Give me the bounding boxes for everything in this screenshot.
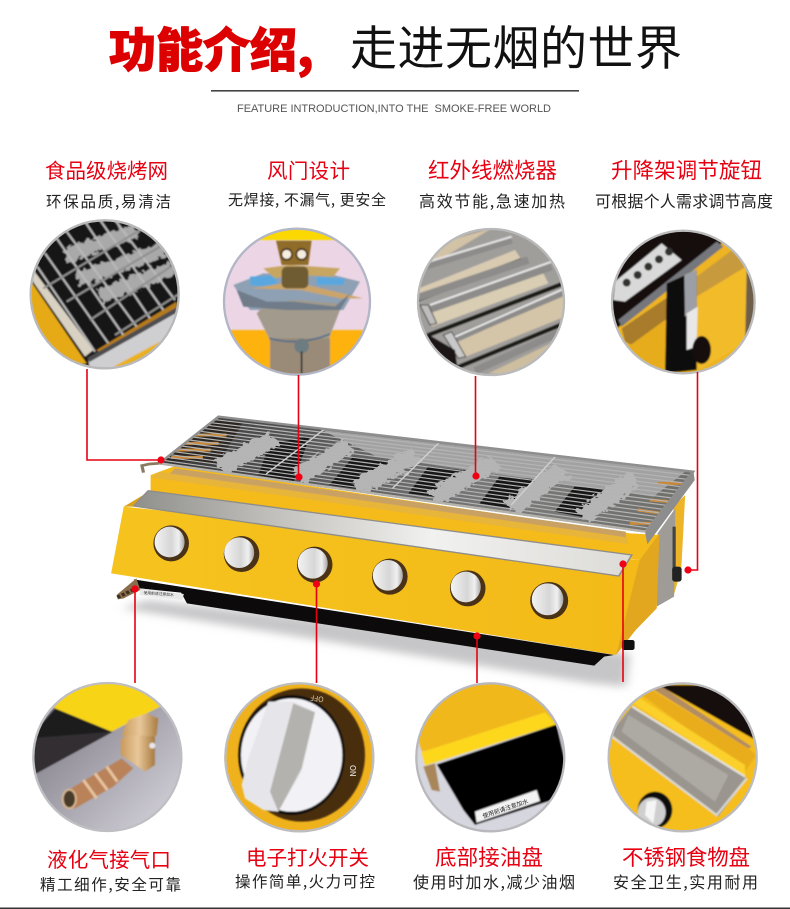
label: air door: 无焊接, 不漏气, 更安全 [228,189,386,210]
label: ignition switch: 电子打火开关 [246,841,369,871]
label: grill mesh [45,154,171,212]
subtitle: FEATURE INTRODUCTION,INTO THE SMOKE-FREE WORLD [237,103,551,115]
label: food tray: 安全卫生,实用耐用 [613,869,758,893]
label: lift knob: 可根据个人需求调节高度 [595,188,773,212]
circle: food tray closeup [608,682,758,835]
control knobs [153,525,568,619]
title: 功能介绍, [109,12,314,81]
black drip tray [134,579,635,666]
stainless food tray [134,491,632,576]
circle: ignition switch closeup: ON [347,765,358,777]
circle: air door closeup [223,227,373,377]
grill interior burners [159,417,693,532]
circle: drip pan closeup [415,682,568,835]
circle: gas inlet closeup [30,680,187,837]
circle: grill mesh closeup [27,217,183,373]
title: 走进无烟的世界 [350,10,682,79]
title [109,10,682,81]
label: ignition switch [235,841,375,892]
label: gas inlet [40,843,181,895]
label: air door [228,154,386,210]
label: drip pan: 使用时加水,减少油烟 [413,869,575,893]
product: yellow grill [111,417,694,687]
circle: drip pan closeup: 使用前请注意加水 [481,796,529,820]
label: drip pan: 底部接油盘 [435,841,543,872]
label: lift knob: 升降架调节旋钮 [611,154,762,185]
front panel [111,507,640,655]
connector lines: top [87,369,698,574]
label: grill mesh: 环保品质,易清洁 [46,190,171,212]
label: grill mesh: 食品级烧烤网 [45,154,168,184]
label: infrared burner [419,154,565,212]
label: food tray [613,841,758,893]
upper body band [124,466,658,560]
label: gas inlet: 液化气接气口 [47,843,171,873]
label: air door: 风门设计 [267,154,350,184]
floor shadow [122,600,630,687]
label: lift knob [595,154,773,212]
label: food tray: 不锈钢食物盘 [622,841,750,872]
label: infrared burner: 高效节能,急速加热 [419,188,565,212]
label: infrared burner: 红外线燃烧器 [428,154,557,185]
black drip tray: 使用前请注意加水 [143,590,174,598]
far side panel [616,495,685,655]
circle: infrared burner closeup [415,227,568,380]
circle: ignition switch closeup [224,682,374,832]
label: drip pan [413,841,575,893]
label: ignition switch: 操作简单,火力可控 [235,870,375,892]
label: gas inlet: 精工细作,安全可靠 [40,873,181,895]
circle: ignition switch closeup: OFF [309,692,324,705]
gas inlet [117,578,140,599]
circle: lift knob closeup [608,227,758,377]
grill wire rack [142,417,694,543]
connector lines: bottom [131,560,627,683]
